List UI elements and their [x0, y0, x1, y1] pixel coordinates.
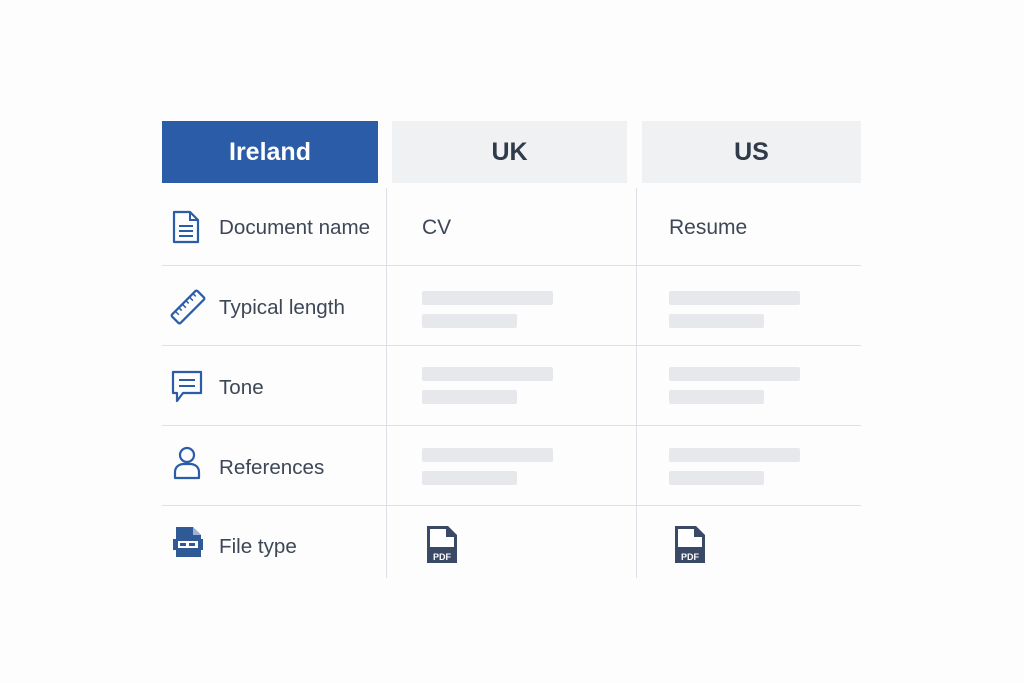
bars: UK tone: [422, 367, 553, 404]
icon: speech bubble: [172, 370, 202, 402]
row label: Tone: Tone: [219, 376, 264, 399]
bars: UK length: [422, 291, 553, 328]
bars: US references: [669, 448, 800, 485]
bars: US length: [669, 291, 800, 328]
icon: PDF US: PDF: [681, 552, 700, 562]
header: UK: [392, 121, 627, 183]
value: Resume: Resume: [669, 216, 747, 239]
header: Ireland: [162, 121, 378, 183]
value: CV: CV: [422, 216, 451, 239]
icon: PDF US: [675, 526, 705, 563]
header: US: [642, 121, 861, 183]
bars: UK references: [422, 448, 553, 485]
header: Ireland: Ireland: [229, 138, 311, 166]
icon: ruler: [170, 290, 206, 324]
icon: PDF UK: PDF: [433, 552, 452, 562]
row label: References: References: [219, 456, 324, 479]
icon: PDF UK: [427, 526, 457, 563]
row label: File type: File type: [219, 535, 297, 558]
header: US: US: [734, 138, 769, 166]
bars: US tone: [669, 367, 800, 404]
icon: document: [172, 210, 200, 244]
header: UK: UK: [491, 138, 528, 166]
icon: file type: [173, 527, 203, 557]
icon: person: [174, 446, 200, 480]
row label: Document name: Document name: [219, 216, 370, 239]
row label: Typical length: Typical length: [219, 296, 345, 319]
